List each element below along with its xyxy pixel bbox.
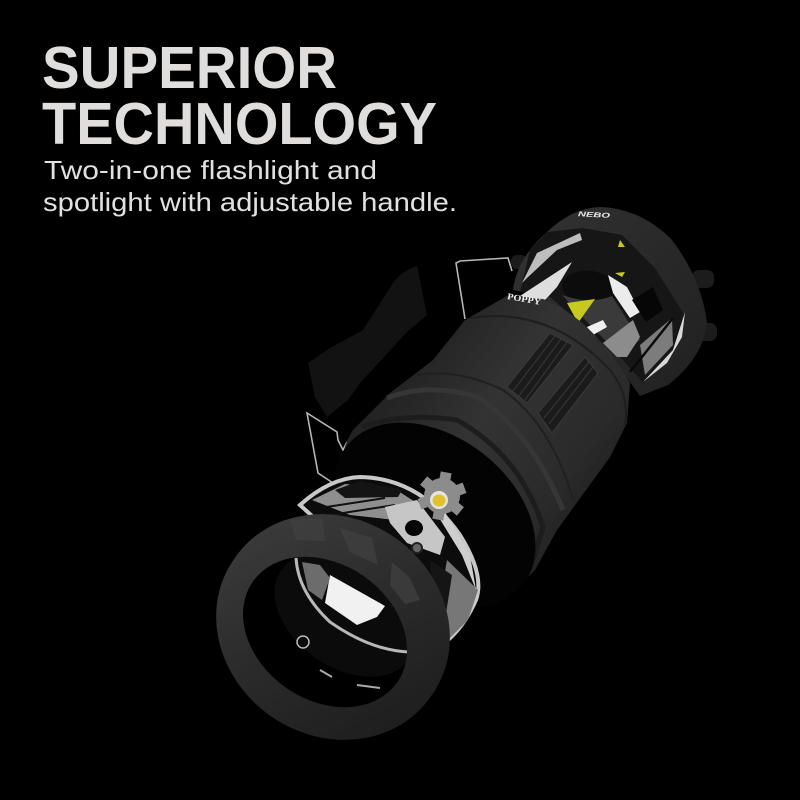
POPPY label: POPPY [507,291,542,307]
bright reflector patch [325,575,385,625]
LED halo [430,491,448,509]
LED chip [432,494,446,506]
body opening [299,385,571,645]
NEBO label: NEBO [578,211,611,220]
inner silver ring [296,558,408,652]
front bezel ring [216,514,450,740]
yellow LED strip [567,240,625,323]
title: SUPERIOR [42,35,337,101]
LED star board [418,471,466,521]
cap lens interior [520,228,685,383]
upper wire handle [456,258,512,319]
body shell [340,296,630,595]
plate hole [405,520,423,536]
lantern body [299,291,630,645]
handle strap [308,266,427,417]
star gear [418,471,466,521]
grip ribs [507,333,598,433]
lower wire handle [307,413,347,483]
plate screw [412,543,422,553]
lens screw [297,636,309,648]
chrome reflections [520,233,685,382]
subtitle: Two-in-one flashlight and [44,155,377,185]
black hole backing [211,523,439,741]
shoulder ridge [470,316,626,425]
front lens interior [211,523,439,741]
knurl highlights [290,518,420,604]
mounting plate [385,500,445,555]
cap lugs [511,255,717,341]
body bands [362,373,573,570]
reflector segments [312,481,478,640]
reflector slats [302,562,330,600]
subtitle: spotlight with adjustable handle. [43,187,457,217]
title [42,35,437,157]
chrome reflector [300,477,478,640]
title: TECHNOLOGY [42,91,437,157]
cap shell [513,207,707,396]
top cap [511,207,717,396]
dark lens disc [251,528,439,702]
subtitle [43,155,457,217]
lens lower glints [320,670,380,688]
ring body [216,514,450,740]
reflector bowl [300,477,478,640]
